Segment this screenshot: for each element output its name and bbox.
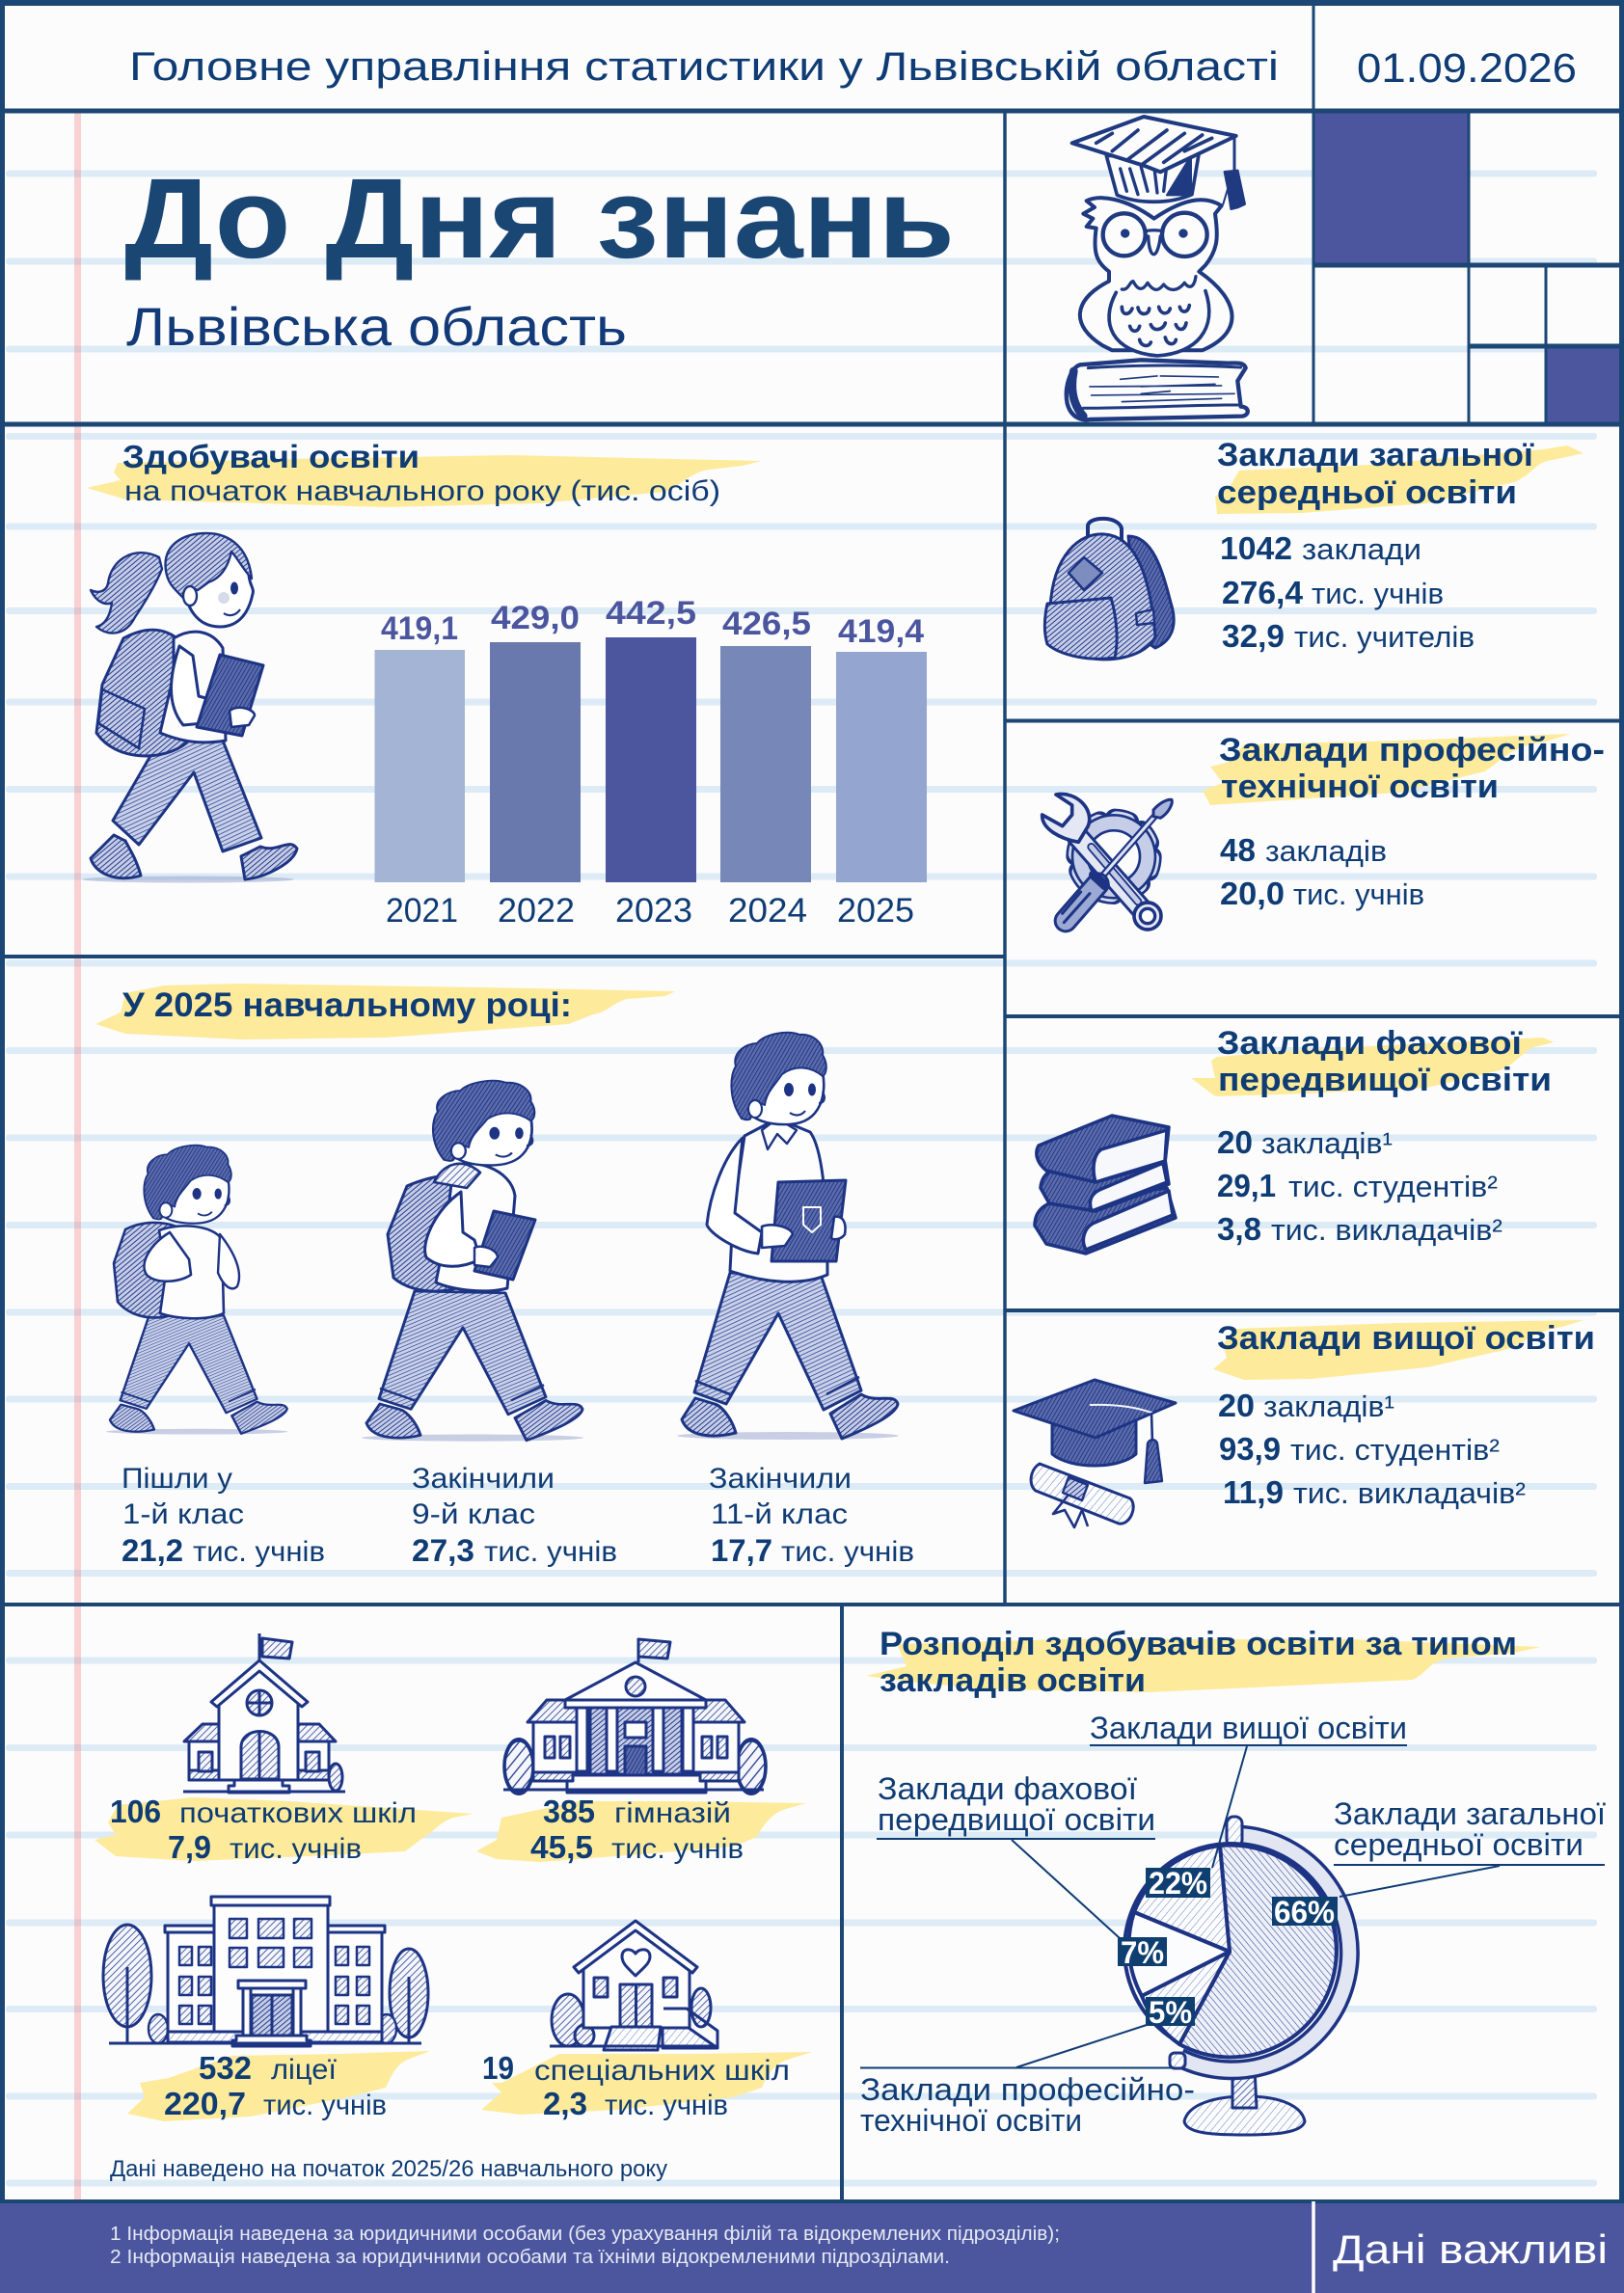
heading: organisation: Головне управління статистики у Львівській області bbox=[129, 43, 1279, 89]
text: lyceums: тис. учнів bbox=[263, 2090, 387, 2121]
pie callouts bbox=[1118, 1866, 1338, 2030]
panel: title bbox=[124, 155, 955, 357]
stats: 3,8 bbox=[1217, 1211, 1261, 1247]
tagline: Дані важливі bbox=[1333, 2226, 1608, 2272]
stats: тис. учнів bbox=[1312, 577, 1444, 610]
panel: general secondary education bbox=[1044, 437, 1583, 660]
stats: 20 bbox=[1218, 1388, 1255, 1423]
text: ninth grade: 27,3 bbox=[412, 1533, 474, 1568]
data note: Дані наведено на початок 2025/26 навчального року bbox=[110, 2156, 667, 2182]
panel: professional pre-higher education bbox=[1035, 1025, 1554, 1254]
labels: Заклади вищої освіти bbox=[1090, 1711, 1407, 1745]
stats bbox=[1218, 1388, 1526, 1510]
text: lyceums: 220,7 bbox=[164, 2086, 246, 2121]
heading: Заклади фахової bbox=[1217, 1025, 1524, 1062]
text: eleventh grade bbox=[709, 1463, 914, 1568]
heading: Заклади професійно- bbox=[1219, 732, 1605, 769]
stats: тис. студентів² bbox=[1290, 1433, 1500, 1467]
bar year labels bbox=[386, 892, 914, 930]
text: gymnasiums: гімназій bbox=[614, 1797, 731, 1829]
subheading: на початок навчального року (тис. осіб) bbox=[124, 475, 720, 507]
panel: learners chart bbox=[82, 439, 927, 930]
panel: vocational education bbox=[1042, 732, 1605, 930]
panel: distribution pie on globe bbox=[860, 1626, 1606, 2138]
bar value labels: 442,5 bbox=[606, 595, 696, 632]
icon: backpack bbox=[1044, 519, 1174, 660]
heading bbox=[1219, 732, 1605, 805]
stats: заклади bbox=[1302, 532, 1421, 566]
text: eleventh grade: 11-й клас bbox=[711, 1498, 848, 1530]
text: eleventh grade: тис. учнів bbox=[781, 1536, 914, 1568]
text: primary schools: тис. учнів bbox=[230, 1833, 362, 1865]
stats: закладів bbox=[1265, 834, 1387, 868]
bar chart bbox=[374, 595, 927, 930]
footnotes: 1 Інформація наведена за юридичними особами (без урахування філій та відокремлених підрозділів); bbox=[110, 2224, 1060, 2245]
heading: технічної освіти bbox=[1221, 769, 1499, 805]
text: special schools bbox=[482, 2050, 790, 2121]
stats: тис. викладачів² bbox=[1293, 1476, 1526, 1510]
stats bbox=[1220, 530, 1475, 654]
heading: середньої освіти bbox=[1217, 474, 1517, 511]
text: gymnasiums: тис. учнів bbox=[611, 1833, 744, 1865]
labels: Заклади фахової bbox=[878, 1771, 1137, 1806]
stats: 1042 bbox=[1220, 530, 1292, 566]
labels: Заклади професійно- bbox=[860, 2072, 1195, 2107]
pie callouts: 7% bbox=[1121, 1935, 1164, 1970]
icon: graduation cap and diploma bbox=[1014, 1380, 1176, 1527]
leader lines bbox=[860, 1745, 1605, 2067]
heading highlight bbox=[95, 984, 675, 1039]
labels: технічної освіти bbox=[860, 2103, 1082, 2138]
pie callouts: 66% bbox=[1274, 1895, 1335, 1929]
text: gymnasiums bbox=[530, 1794, 744, 1865]
bar value labels: 419,1 bbox=[381, 610, 458, 647]
stats: 29,1 bbox=[1217, 1168, 1276, 1203]
text: primary schools: початкових шкіл bbox=[179, 1797, 417, 1829]
highlight bbox=[1191, 1038, 1554, 1096]
stats: 93,9 bbox=[1219, 1431, 1281, 1467]
stats: тис. викладачів² bbox=[1271, 1213, 1502, 1247]
pie callouts: 5% bbox=[1149, 1995, 1192, 2030]
stats: 20 bbox=[1217, 1124, 1253, 1160]
icon: lyceum bbox=[103, 1897, 428, 2046]
illustration: 9th-grader bbox=[362, 1081, 583, 1442]
heading bbox=[1217, 437, 1534, 511]
panel: school types bbox=[95, 1633, 812, 2182]
illustration: 11th-grader bbox=[677, 1033, 899, 1440]
highlight bbox=[866, 1639, 1541, 1692]
bar value labels bbox=[381, 595, 924, 650]
bar year labels: 2025 bbox=[837, 892, 914, 930]
heading: Здобувачі освіти bbox=[122, 439, 420, 474]
footnotes bbox=[110, 2224, 1060, 2268]
highlight bbox=[1213, 1320, 1583, 1380]
pie callouts: 22% bbox=[1149, 1866, 1207, 1901]
text: lyceums: 532 bbox=[199, 2050, 252, 2086]
stats: тис. студентів² bbox=[1288, 1170, 1498, 1203]
heading: Заклади загальної bbox=[1217, 437, 1534, 473]
bar value labels: 429,0 bbox=[491, 600, 580, 636]
labels: Заклади загальної bbox=[1334, 1796, 1606, 1831]
stats: закладів¹ bbox=[1263, 1389, 1394, 1423]
text: first grade: 21,2 bbox=[122, 1533, 183, 1568]
stats: тис. учнів bbox=[1293, 877, 1424, 911]
date: 01.09.2026 bbox=[1357, 45, 1577, 92]
stats: 11,9 bbox=[1223, 1474, 1284, 1510]
labels: передвищої освіти bbox=[878, 1802, 1155, 1837]
panel: header bbox=[129, 43, 1577, 92]
text: lyceums bbox=[164, 2050, 387, 2121]
text: gymnasiums: 385 bbox=[543, 1794, 595, 1829]
heading: закладів освіти bbox=[880, 1662, 1146, 1699]
icon: girl with backpack bbox=[82, 533, 297, 883]
title: До Дня знань bbox=[124, 155, 955, 283]
text: gymnasiums: 45,5 bbox=[530, 1829, 593, 1865]
globe pie chart bbox=[1124, 1817, 1349, 2135]
icon: gymnasium bbox=[503, 1638, 766, 1794]
text: first grade bbox=[122, 1463, 325, 1568]
text: lyceums: ліцеї bbox=[271, 2054, 338, 2086]
labels bbox=[860, 1711, 1606, 2138]
text: eleventh grade: Закінчили bbox=[709, 1463, 852, 1495]
panel: mosaic blocks bbox=[1313, 111, 1622, 424]
panel: footer bbox=[0, 2201, 1624, 2293]
stats: закладів¹ bbox=[1261, 1126, 1393, 1160]
stats: 48 bbox=[1220, 832, 1256, 868]
icon: owl on books with graduation cap bbox=[1067, 117, 1248, 419]
text: ninth grade: Закінчили bbox=[412, 1463, 555, 1495]
bar value labels: 426,5 bbox=[722, 606, 811, 642]
stats bbox=[1217, 1124, 1502, 1247]
highlight bbox=[1203, 734, 1571, 805]
subtitle: Львівська область bbox=[126, 296, 627, 357]
text: primary schools: 7,9 bbox=[168, 1829, 211, 1865]
text: primary schools: 106 bbox=[110, 1794, 161, 1829]
stats: 32,9 bbox=[1222, 618, 1285, 654]
icon: primary school bbox=[183, 1633, 345, 1793]
panel: higher education bbox=[1014, 1320, 1595, 1527]
bar year labels: 2022 bbox=[498, 892, 575, 930]
heading: Заклади вищої освіти bbox=[1217, 1320, 1595, 1357]
heading highlight bbox=[87, 455, 762, 507]
footnotes: 2 Інформація наведена за юридичними особами та їхніми відокремленими підрозділами. bbox=[110, 2247, 950, 2268]
panel: graduates 2025 bbox=[95, 984, 914, 1568]
bar year labels: 2024 bbox=[728, 892, 807, 930]
text: ninth grade: 9-й клас bbox=[412, 1498, 535, 1530]
text: eleventh grade: 17,7 bbox=[711, 1533, 772, 1568]
stats: 20,0 bbox=[1220, 876, 1285, 911]
illustration: first-grader bbox=[106, 1146, 288, 1435]
heading: У 2025 навчальному році: bbox=[122, 986, 572, 1024]
text: first grade: тис. учнів bbox=[193, 1536, 325, 1568]
heading bbox=[1217, 1025, 1552, 1098]
text: special schools: 2,3 bbox=[543, 2086, 587, 2121]
text: first grade: 1-й клас bbox=[122, 1498, 244, 1530]
text: special schools: тис. учнів bbox=[605, 2090, 728, 2121]
highlight bbox=[1215, 445, 1583, 514]
text: special schools: спеціальних шкіл bbox=[534, 2055, 790, 2087]
bar value labels: 419,4 bbox=[838, 613, 924, 650]
icon: wrench and screwdriver bbox=[1042, 794, 1172, 930]
text: ninth grade: тис. учнів bbox=[484, 1536, 617, 1568]
heading: Розподіл здобувачів освіти за типом bbox=[880, 1626, 1517, 1662]
heading bbox=[880, 1626, 1517, 1699]
text: ninth grade bbox=[412, 1463, 617, 1568]
text: primary schools bbox=[110, 1794, 417, 1865]
text: special schools: 19 bbox=[482, 2050, 514, 2086]
stats: 276,4 bbox=[1222, 575, 1304, 610]
bar year labels: 2021 bbox=[386, 892, 458, 930]
icon: special school bbox=[550, 1921, 718, 2050]
stats bbox=[1220, 832, 1424, 911]
text: first grade: Пішли у bbox=[122, 1463, 232, 1495]
bar year labels: 2023 bbox=[615, 892, 692, 930]
highlights bbox=[95, 1797, 812, 2121]
icon: stack of books bbox=[1035, 1116, 1176, 1254]
heading: передвищої освіти bbox=[1218, 1062, 1552, 1098]
stats: тис. учителів bbox=[1294, 620, 1475, 654]
labels: середньої освіти bbox=[1334, 1827, 1583, 1862]
